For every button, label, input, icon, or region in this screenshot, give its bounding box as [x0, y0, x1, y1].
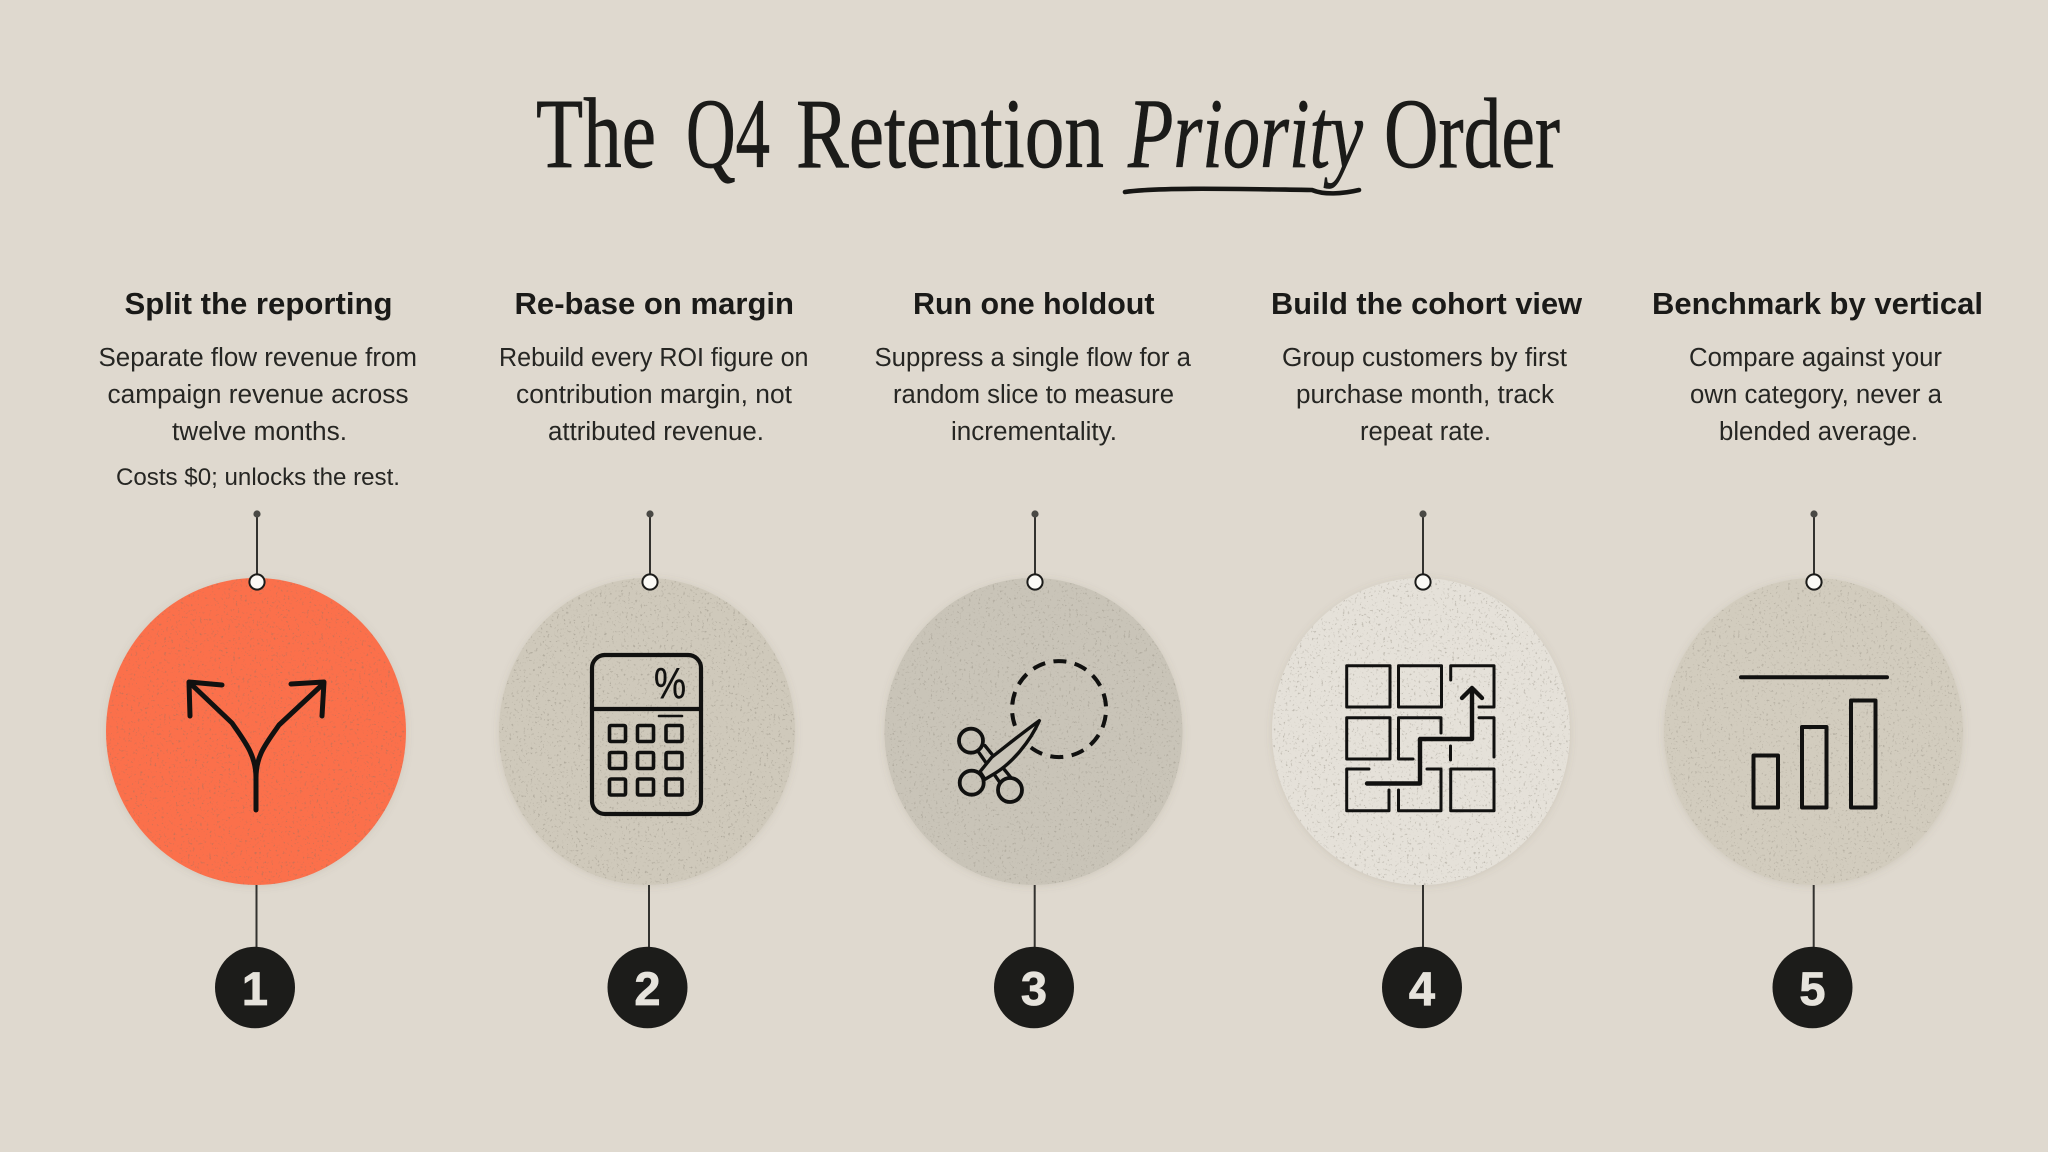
number badge 4 — [1382, 947, 1462, 1028]
title: Retention — [796, 78, 1104, 189]
description: Group customers by first — [1282, 344, 1567, 372]
title: The — [536, 78, 656, 189]
icon: calculator with percent — [592, 655, 701, 814]
icon: cohort grid with rising arrow — [1347, 666, 1494, 811]
number badge 5 — [1772, 947, 1852, 1028]
description — [874, 344, 1192, 446]
description: attributed revenue. — [548, 418, 764, 446]
heading: Run one holdout — [913, 286, 1154, 321]
heading: Build the cohort view — [1271, 286, 1583, 321]
disc — [499, 578, 795, 885]
description: repeat rate. — [1360, 418, 1491, 446]
pin — [1027, 510, 1043, 590]
panel: step 4 build the cohort view — [1271, 286, 1583, 1028]
title: Order — [1384, 78, 1560, 189]
description: blended average. — [1719, 418, 1918, 446]
description: Rebuild every ROI figure on — [499, 344, 808, 372]
panel: step 2 re-base on margin — [499, 286, 808, 1028]
description — [1689, 344, 1943, 446]
number badge 1 — [215, 947, 295, 1028]
panel: step 3 run one holdout — [874, 286, 1192, 1028]
pin — [1415, 510, 1431, 590]
description: Compare against your — [1689, 344, 1943, 372]
heading: Split the reporting — [124, 286, 392, 321]
number badge 3: 3 — [1021, 962, 1047, 1015]
description: Suppress a single flow for a — [874, 344, 1192, 372]
connector — [1813, 885, 1815, 948]
icon: splitting arrows — [189, 682, 324, 810]
disc — [106, 578, 406, 885]
description — [1282, 344, 1567, 446]
panel: step 5 benchmark by vertical — [1652, 286, 1983, 1028]
panel: step 1 split the reporting — [98, 286, 417, 1028]
cost note: Costs $0; unlocks the rest. — [116, 464, 400, 491]
number badge 4: 4 — [1409, 962, 1435, 1015]
icon: bar chart with benchmark line — [1741, 677, 1887, 808]
pin — [642, 510, 658, 590]
number badge 1: 1 — [242, 962, 268, 1015]
description: contribution margin, not — [516, 381, 792, 409]
disc — [1272, 578, 1570, 885]
description: campaign revenue across — [108, 381, 408, 409]
description: own category, never a — [1690, 381, 1943, 409]
number badge 2: 2 — [634, 962, 661, 1015]
description: twelve months. — [172, 418, 347, 446]
connector — [648, 885, 650, 948]
title — [536, 78, 1560, 193]
number badge 2 — [608, 947, 688, 1028]
description — [98, 344, 417, 446]
pin — [249, 510, 265, 590]
connector — [256, 885, 258, 948]
title: Priority — [1127, 78, 1363, 189]
title: Q4 — [686, 78, 770, 189]
icon: calculator with percent: % — [654, 659, 686, 708]
description: purchase month, track — [1296, 381, 1554, 409]
pin — [1806, 510, 1822, 590]
number badge 3 — [994, 947, 1074, 1028]
hand-drawn underline — [1125, 189, 1359, 193]
connector — [1034, 885, 1036, 948]
description — [499, 344, 808, 446]
connector — [1422, 885, 1424, 948]
disc — [1664, 578, 1963, 885]
description: random slice to measure — [893, 381, 1174, 409]
heading: Benchmark by vertical — [1652, 286, 1983, 321]
icon: scissors cutting dashed circle — [959, 661, 1106, 802]
heading: Re-base on margin — [514, 286, 794, 321]
number badge 5: 5 — [1799, 962, 1826, 1015]
description: incrementality. — [951, 418, 1117, 446]
disc — [884, 578, 1182, 885]
description: Separate flow revenue from — [98, 344, 417, 372]
